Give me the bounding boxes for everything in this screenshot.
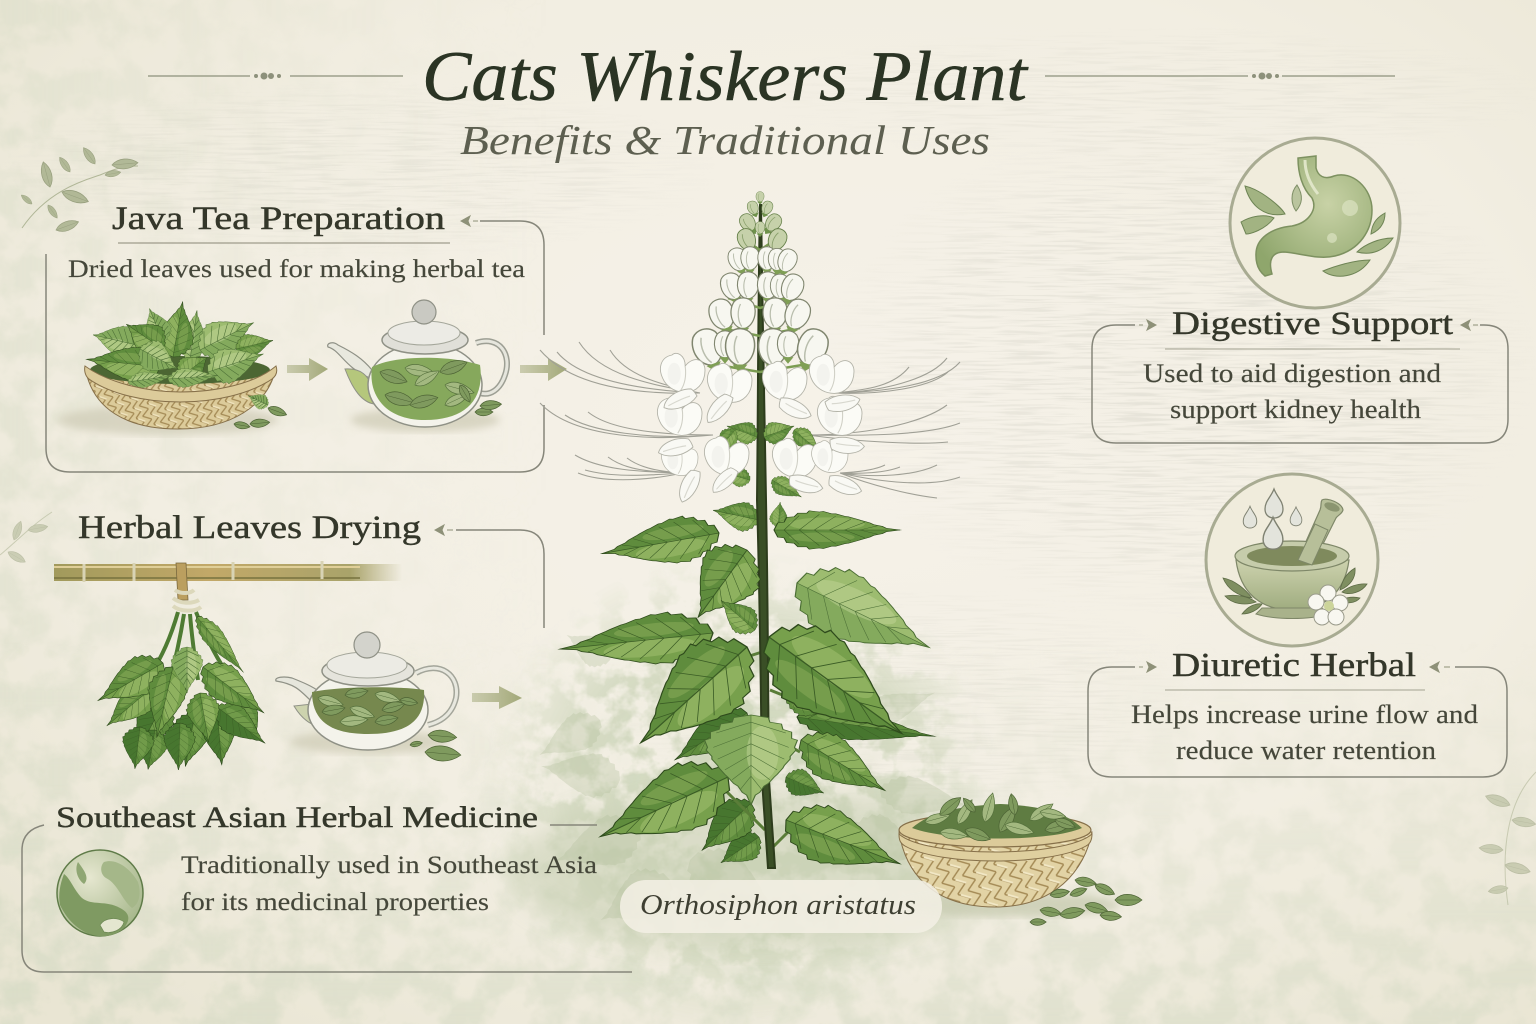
decorative sprig bottom-right: [1479, 772, 1536, 905]
icon: mortar and pestle in circle: [1206, 474, 1378, 646]
icon: arrow left of Digestive Support: [1139, 320, 1156, 330]
panel outline: digestive: [1092, 325, 1508, 443]
background foliage silhouettes behind the plant: [530, 621, 972, 942]
text: Java tea description: Dried leaves used for making herbal tea: [68, 256, 525, 283]
heading: Herbal Leaves Drying: Herbal Leaves Drying: [78, 510, 421, 546]
text: digestive description: [1143, 359, 1441, 424]
icon: stomach in circle: [1230, 138, 1400, 308]
decorative sprig top-left: [20, 145, 138, 234]
text: digestive description: support kidney health: [1170, 395, 1421, 424]
icon: globe: [57, 850, 143, 936]
panel: Digestive Support: [1092, 306, 1508, 443]
text: digestive description: Used to aid digestion and: [1143, 359, 1441, 388]
bracts: [708, 415, 826, 505]
panel: Java Tea Preparation: [46, 201, 567, 472]
connector outline: drying: [456, 530, 544, 628]
arrow: leaves to teapot: [287, 358, 328, 381]
panel: Diuretic Herbal: [1088, 647, 1507, 777]
panel: Herbal Leaves Drying: [54, 510, 544, 772]
text: Southeast Asia description: Traditionally used in Southeast Asia: [181, 852, 597, 879]
illustration: basket of dried leaves: [899, 792, 1142, 925]
text: diuretic description: [1131, 700, 1478, 765]
heading: Diuretic Herbal: Diuretic Herbal: [1172, 647, 1416, 684]
back leaves: [664, 496, 937, 876]
title ornament right: [1045, 72, 1395, 80]
panel outline: Java tea: [46, 221, 544, 472]
text: diuretic description: reduce water retention: [1176, 736, 1436, 765]
heading: Digestive Support: Digestive Support: [1172, 306, 1453, 342]
label pill: Orthosiphon aristatus: Orthosiphon aristatus: [640, 890, 916, 921]
text: Southeast Asia description: [181, 852, 597, 916]
icon: small arrow to heading: [461, 216, 478, 226]
icon: small arrow to drying heading: [435, 525, 453, 535]
heading: Java Tea Preparation: Java Tea Preparation: [112, 201, 445, 237]
illustration: central Cats Whiskers plant: [540, 192, 960, 891]
text: diuretic description: Helps increase urine flow and: [1131, 700, 1478, 729]
icon: arrow left of Diuretic Herbal: [1139, 662, 1156, 672]
heading: Southeast Asian Herbal Medicine: Southeast Asian Herbal Medicine: [56, 801, 538, 834]
panel outline: Southeast Asia: [22, 825, 632, 972]
label pill: Orthosiphon aristatus: [620, 880, 942, 933]
arrow: tea to plant: [520, 358, 567, 381]
illustration: bamboo pole: [54, 561, 402, 582]
whisker stamens: [540, 342, 960, 498]
panel: Southeast Asian Herbal Medicine: [22, 801, 632, 972]
decorative sprig left: [0, 512, 52, 565]
icon: arrow right of Digestive Support: [1461, 320, 1478, 330]
illustration: hanging leaf bunch: [88, 563, 275, 772]
white flowers: [657, 353, 865, 504]
illustration: glass teapot with dried leaves: [276, 632, 462, 763]
title: Cats Whiskers Plant: [422, 38, 1029, 116]
illustration: glass teapot with green tea: [328, 300, 507, 432]
title ornament left: [148, 72, 403, 80]
illustration: basket of fresh leaves: [58, 299, 288, 435]
text: Southeast Asia description: for its medicinal properties: [181, 889, 489, 916]
leaves: [557, 510, 945, 891]
panel outline: diuretic: [1088, 667, 1507, 777]
icon: arrow right of Diuretic Herbal: [1430, 662, 1450, 672]
flower buds: [688, 192, 832, 377]
stem: [757, 205, 775, 868]
subtitle: Benefits & Traditional Uses: [460, 117, 990, 163]
arrow: drying to plant: [472, 686, 522, 709]
